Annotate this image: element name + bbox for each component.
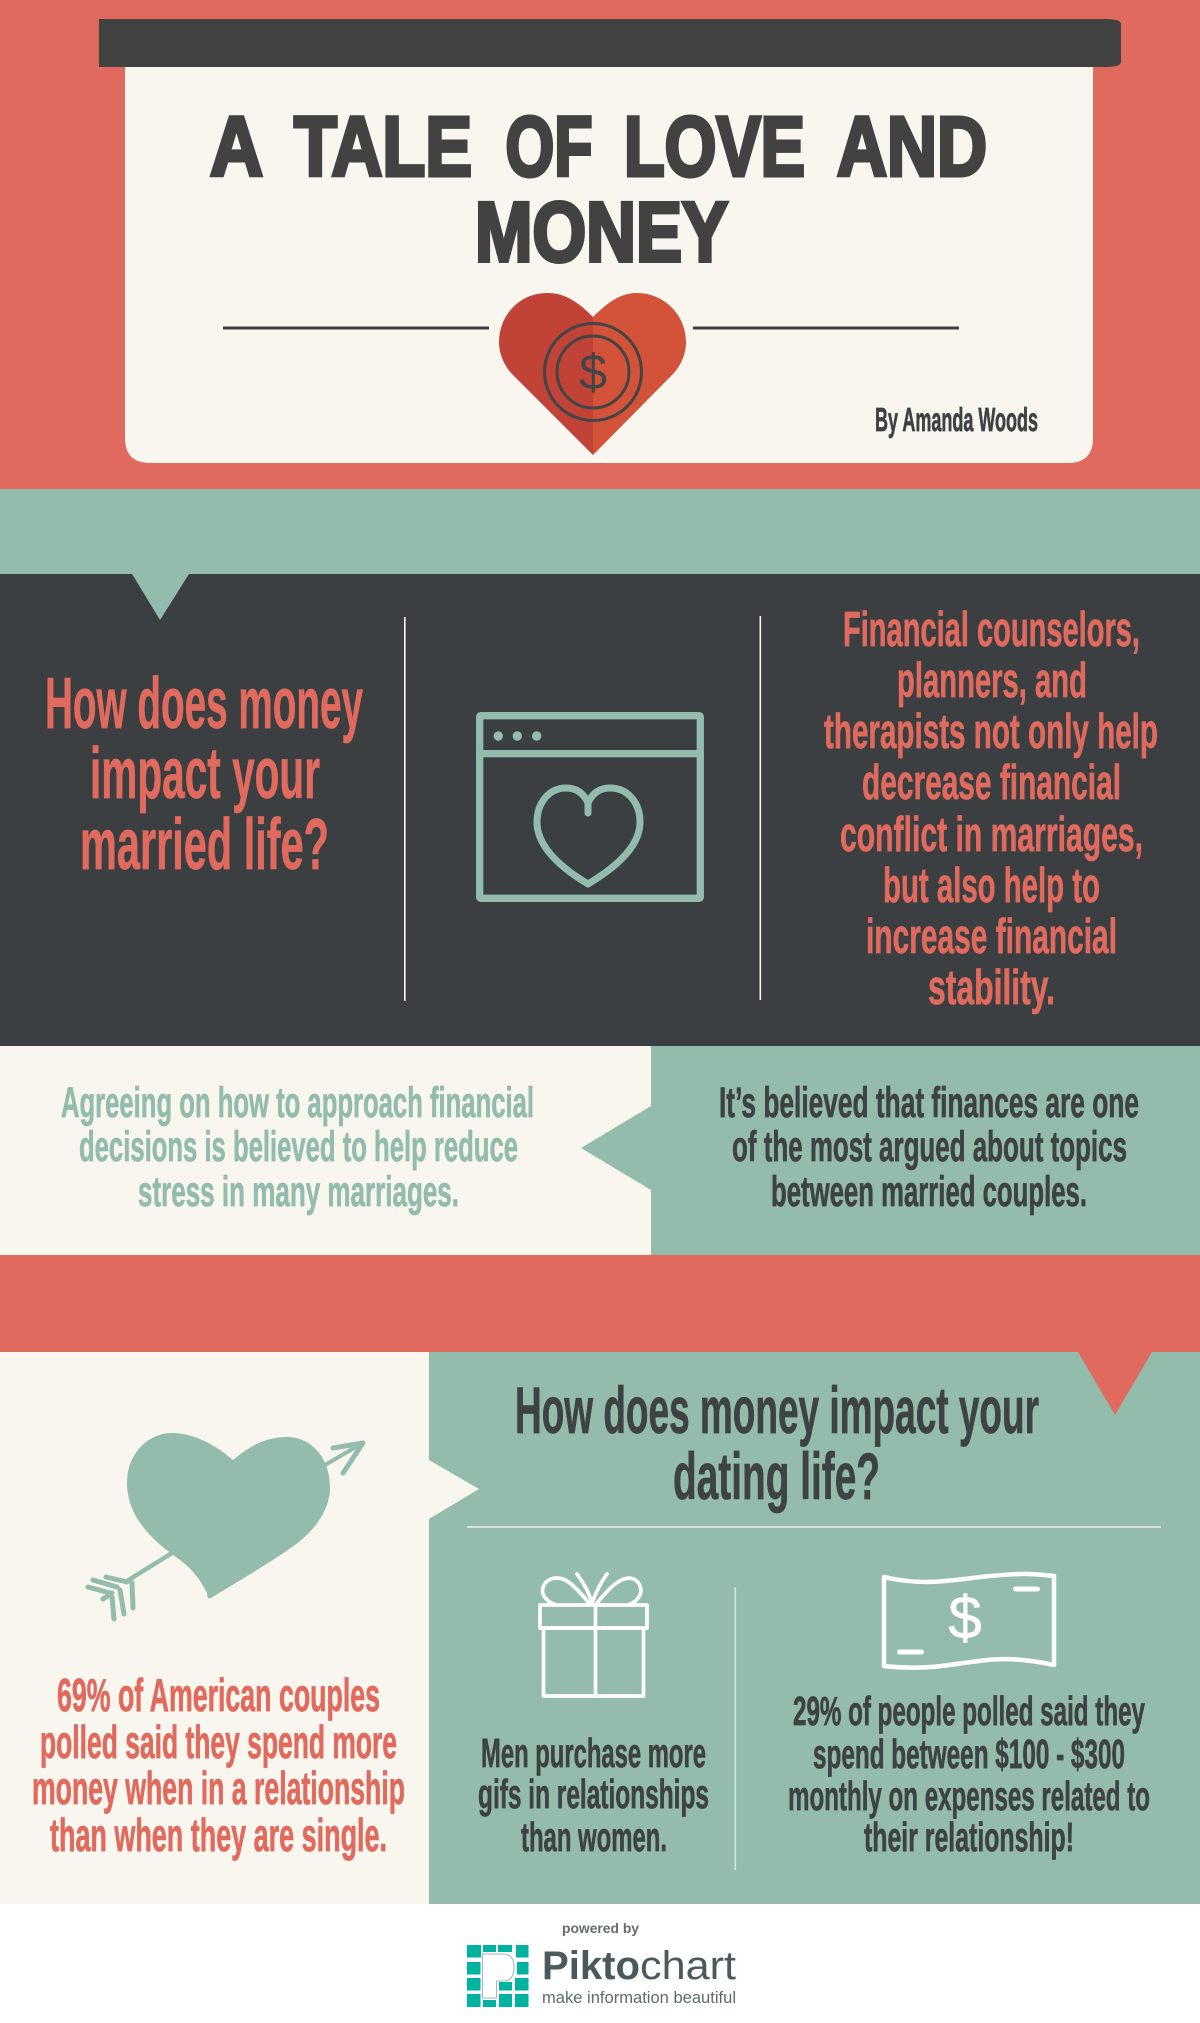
powered by label: powered by — [562, 1920, 639, 1936]
icon: dollar bill — [884, 1574, 1054, 1668]
heading: married life — [45, 664, 363, 885]
heading: married life: How does money — [45, 664, 363, 744]
text: men purchase more: Men purchase more — [481, 1730, 706, 1776]
panel: header — [0, 0, 1200, 489]
vertical divider — [734, 1587, 736, 1870]
text: men purchase more: gifs in relationships — [478, 1771, 709, 1817]
heading: dating life: dating life? — [673, 1439, 880, 1513]
column divider left — [404, 617, 406, 1001]
icon: browser window with heart — [476, 716, 704, 898]
heading: married life: married life? — [80, 805, 329, 885]
text: agreeing on finances: Agreeing on how to approach financial — [61, 1079, 534, 1127]
title: A — [210, 100, 263, 194]
wordmark: Pikto — [542, 1944, 640, 1988]
text: men purchase more: than women. — [521, 1814, 667, 1860]
text: 29% statistic: their relationship! — [864, 1814, 1074, 1860]
title: TALE — [294, 100, 472, 194]
band: red divider — [0, 1255, 1200, 1352]
text: 69% statistic — [32, 1669, 405, 1861]
title: OF — [506, 100, 592, 194]
column divider right — [760, 616, 761, 1000]
left rule — [223, 326, 489, 330]
tagline: make information beautiful — [542, 1988, 736, 2007]
footer: piktochart logo — [467, 1920, 736, 2007]
text: agreeing on finances — [61, 1079, 534, 1216]
logo mark — [467, 1945, 528, 2007]
pointer: teal arrow left — [581, 1106, 651, 1190]
panel: married life — [0, 574, 1200, 1046]
heading: married life: impact your — [90, 734, 320, 814]
pointer: red triangle — [1078, 1352, 1152, 1415]
icon: heart with coin — [499, 293, 686, 455]
text: 69% statistic: money when in a relationship — [32, 1762, 405, 1814]
text: 29% statistic — [788, 1688, 1150, 1860]
icon: heart with coin: $ — [579, 344, 607, 400]
band: teal divider — [0, 489, 1200, 574]
text: most argued topics — [719, 1079, 1139, 1216]
text: 69% statistic: 69% of American couples — [57, 1669, 380, 1721]
title: MONEY — [475, 185, 728, 279]
title: AND — [837, 100, 987, 194]
right rule — [693, 326, 959, 330]
panel: agreeing note — [0, 1046, 651, 1255]
title: LOVE — [624, 100, 805, 194]
panel: argued topics note — [581, 1046, 1200, 1255]
paper card — [125, 67, 1093, 463]
title — [210, 100, 987, 279]
heading: dating life — [515, 1373, 1039, 1513]
text: men purchase more — [478, 1730, 709, 1860]
panel: dating life — [429, 1352, 1200, 1904]
horizontal divider — [467, 1526, 1161, 1528]
text: agreeing on finances: stress in many marriages. — [138, 1168, 459, 1216]
dark top bar — [99, 19, 1121, 67]
pointer: teal triangle — [132, 574, 189, 620]
icon: dollar bill: $ — [948, 1584, 982, 1651]
text: agreeing on finances: decisions is believed to help reduce — [79, 1123, 518, 1171]
icon: heart with arrow — [88, 1433, 363, 1619]
byline: By Amanda Woods — [875, 401, 1038, 438]
icon: gift box — [540, 1574, 647, 1696]
pointer: cream arrow — [429, 1460, 479, 1519]
text: 69% statistic: than when they are single. — [50, 1809, 387, 1861]
text: financial counselors: stability. — [928, 961, 1055, 1015]
wordmark light: chart — [640, 1944, 736, 1988]
text: financial counselors — [824, 603, 1158, 1015]
text: 69% statistic: polled said they spend more — [40, 1716, 397, 1768]
panel: couples spending — [0, 1352, 429, 1904]
